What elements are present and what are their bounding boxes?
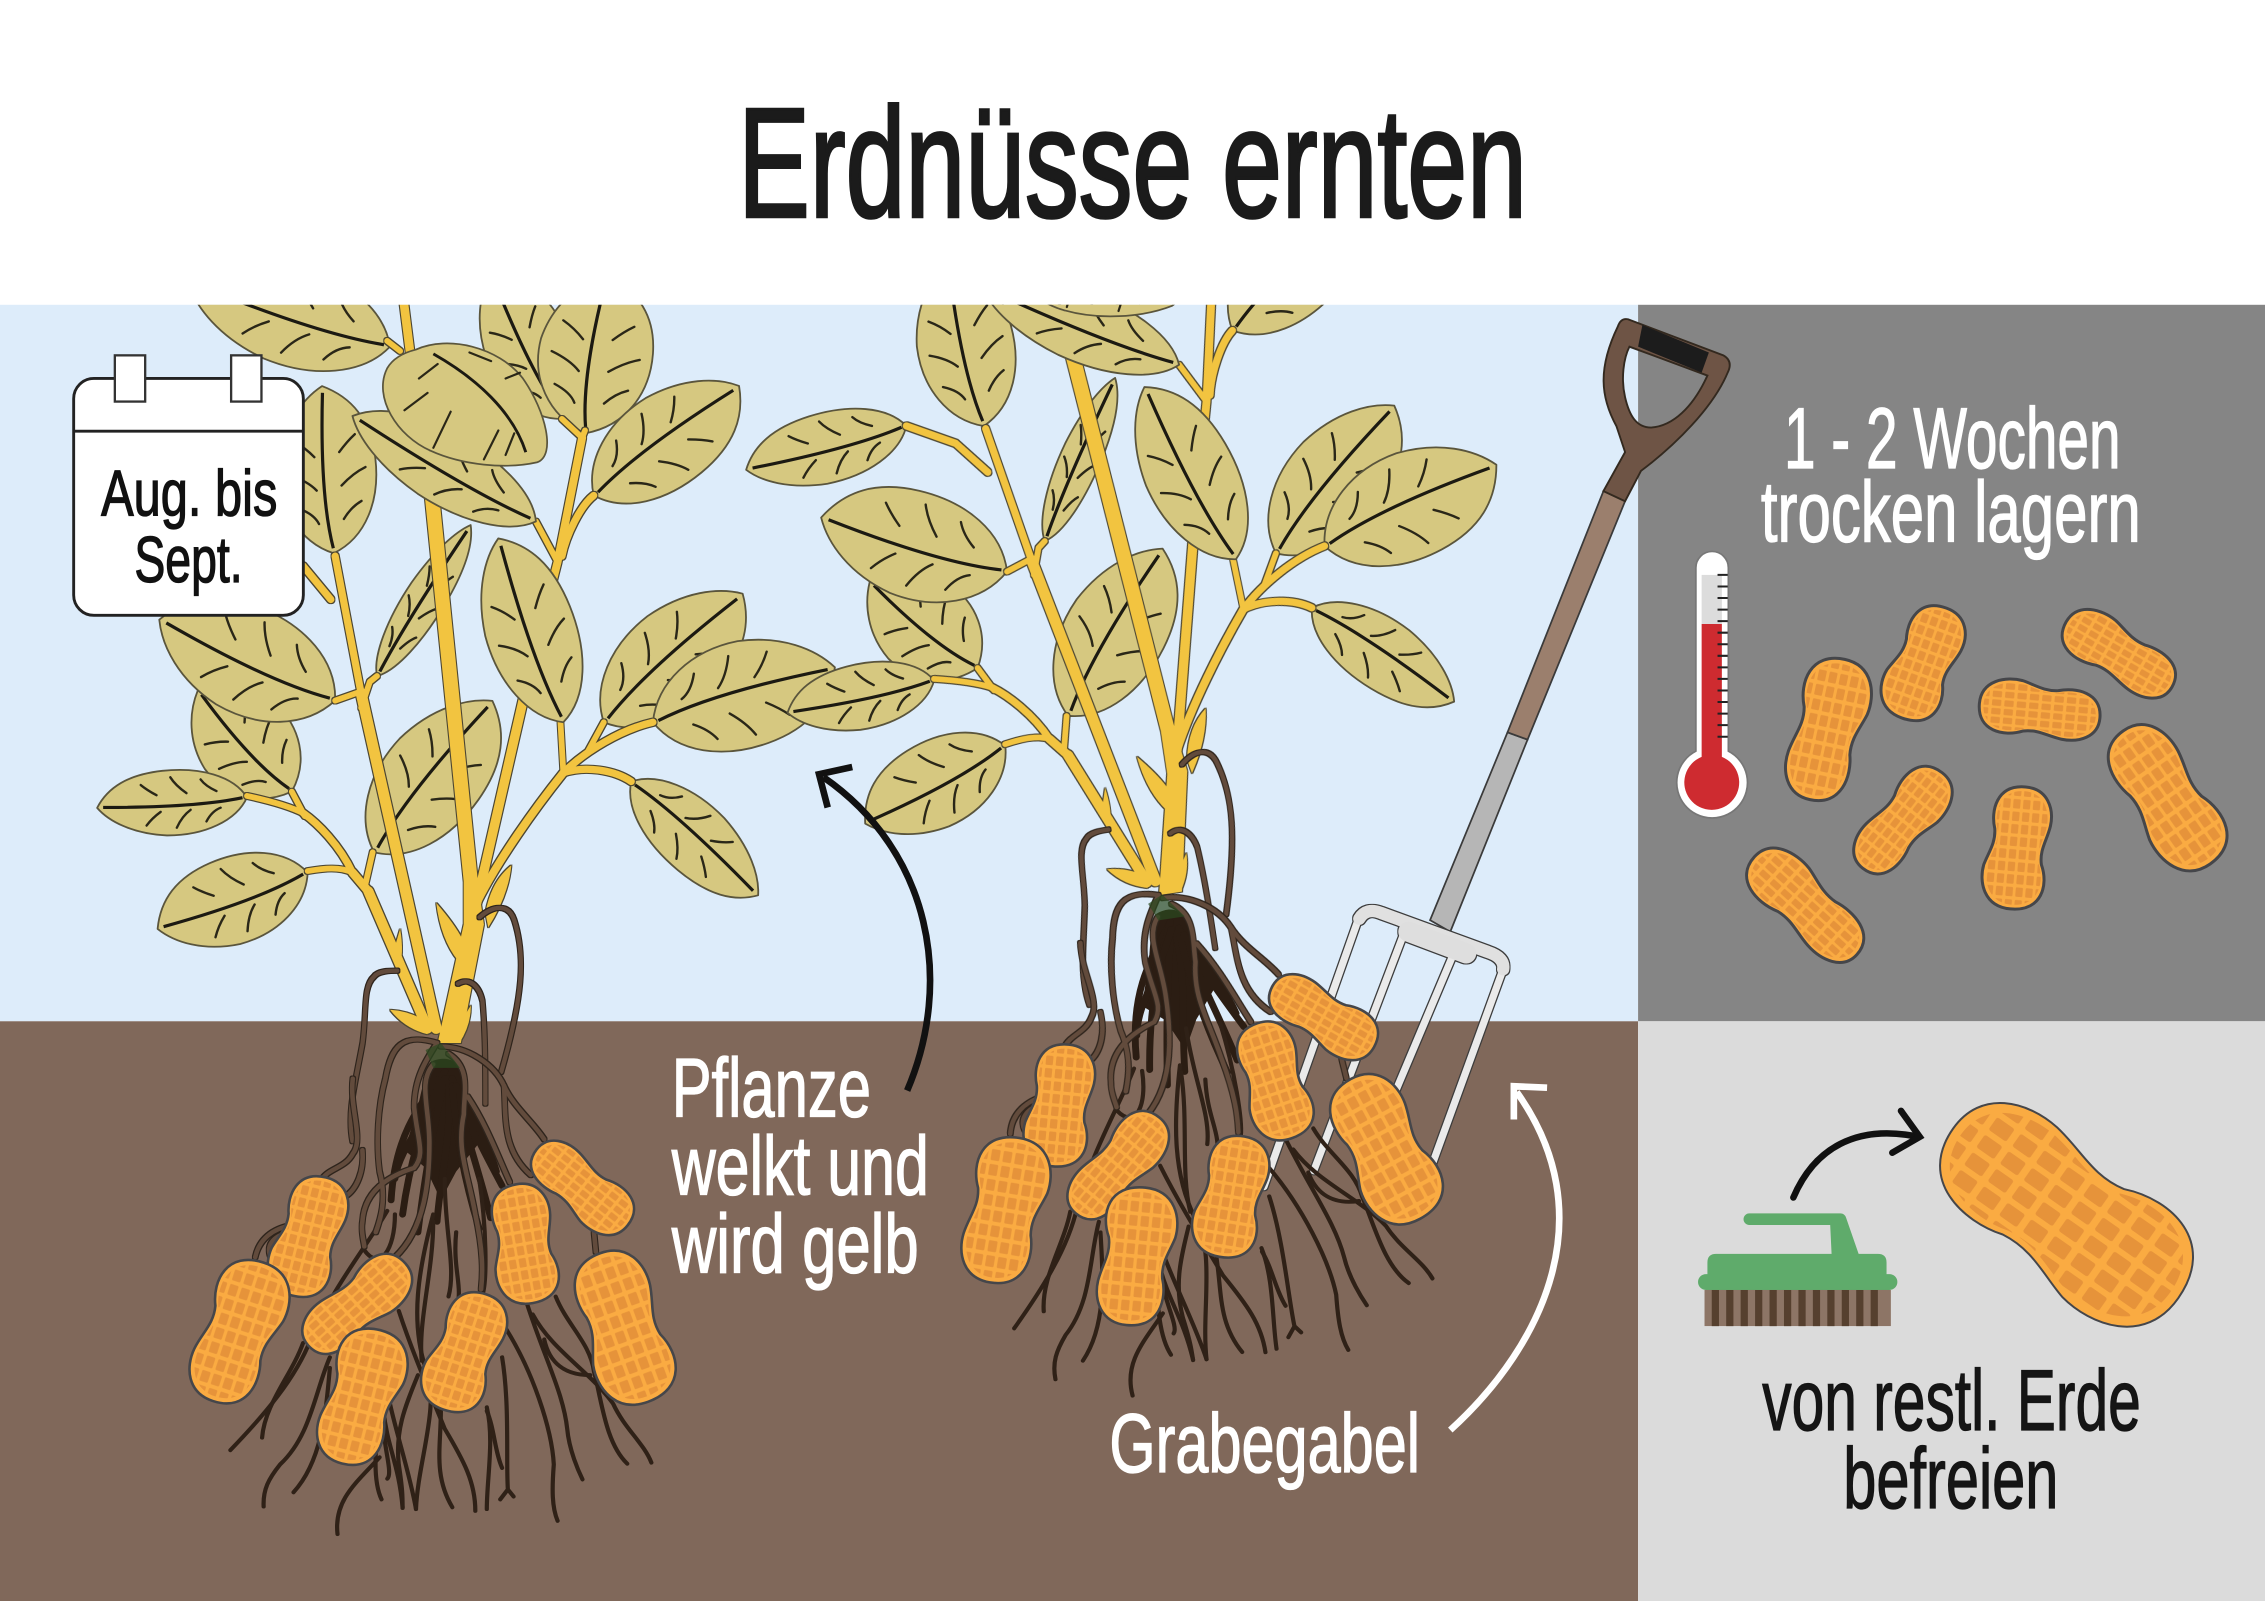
label: plant wilts — [671, 1041, 929, 1291]
title: Erdnüsse ernten — [738, 77, 1527, 251]
fork grip — [1638, 325, 1709, 373]
icon: large clean peanut — [1909, 1078, 2219, 1353]
fork head and tines — [1264, 911, 1503, 1211]
arrow: fork label to fork — [1450, 1086, 1559, 1430]
drying peanuts — [1734, 596, 2242, 974]
brush body — [1698, 1254, 1897, 1290]
label: digging fork: Grabegabel — [1109, 1396, 1420, 1490]
thermometer glass — [1677, 551, 1748, 818]
caption: cleaning — [1762, 1353, 2141, 1527]
crown — [426, 1043, 460, 1068]
calendar header line — [74, 430, 303, 432]
calendar text line two: Sept. — [134, 523, 243, 596]
digging fork — [1264, 319, 1730, 1211]
fine roots — [230, 1179, 651, 1534]
brush bristle stripes — [1712, 1290, 1878, 1326]
root core — [405, 1059, 479, 1200]
arrow: brush to peanut — [1793, 1111, 1920, 1198]
plant left — [88, 234, 850, 1534]
thermometer mercury — [1684, 624, 1739, 810]
panel: storage — [1638, 305, 2265, 1021]
calendar text line one: Aug. bis — [101, 457, 277, 530]
label: plant wilts: welkt und — [671, 1119, 929, 1213]
peanut pegs — [255, 1039, 596, 1289]
peanuts on the plant — [180, 1130, 688, 1473]
calendar ring left — [115, 355, 145, 402]
arrow: plant label to leaves — [819, 767, 930, 1091]
stems — [247, 296, 653, 1043]
roots — [230, 1039, 651, 1534]
caption: cleaning: befreien — [1843, 1431, 2058, 1527]
heading: storage — [1761, 391, 2141, 561]
calendar ring right — [231, 355, 261, 402]
panel: soil — [0, 1021, 1638, 1601]
plants clipped to the scene — [88, 34, 1640, 1534]
label: plant wilts: Pflanze — [672, 1041, 871, 1135]
thermometer empty column — [1702, 575, 1722, 624]
dense root strands — [391, 1071, 502, 1232]
plant right, lifted by the fork — [694, 34, 1640, 1432]
sky tendrils — [351, 908, 521, 1141]
panel: cleaning — [1638, 1021, 2265, 1601]
leaves in front of the stems — [335, 343, 606, 737]
icon: thermometer — [1677, 551, 1748, 818]
brush handle — [1744, 1213, 1859, 1255]
panel: sky — [0, 305, 1638, 1021]
leaves behind the stems — [88, 234, 850, 970]
fork shaft grey — [1430, 732, 1528, 932]
fork handle — [1603, 319, 1730, 501]
icon: scrubbing brush — [1698, 1213, 1897, 1326]
brush bristles — [1705, 1290, 1891, 1326]
fork shaft wood — [1507, 491, 1625, 740]
label: plant wilts: wird gelb — [671, 1197, 919, 1291]
thermometer ticks — [1718, 575, 1728, 737]
calendar — [74, 355, 303, 615]
calendar sheet — [74, 378, 303, 615]
